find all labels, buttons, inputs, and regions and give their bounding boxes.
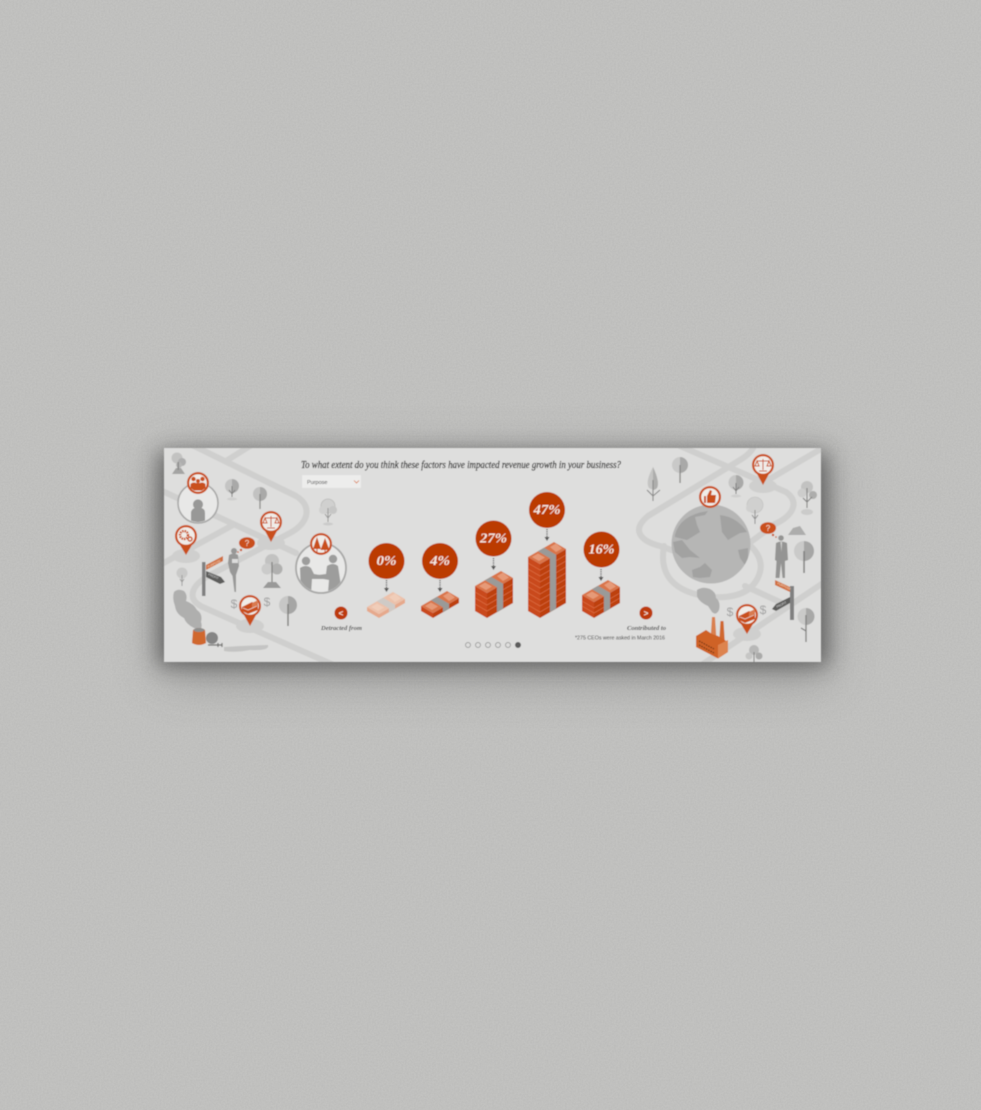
dollar signs right bbox=[727, 603, 767, 619]
smoke: left bbox=[173, 590, 202, 630]
value bubble 27%: 27% bbox=[479, 530, 507, 546]
pin: money bbox=[239, 595, 261, 626]
road network bbox=[160, 444, 826, 670]
pin: trees bbox=[310, 533, 332, 555]
bar: 4 percent bbox=[421, 543, 459, 618]
businessman bbox=[775, 535, 788, 578]
smoke: factory bbox=[697, 588, 720, 614]
label: contributed to: Contributed to bbox=[627, 625, 667, 632]
tree: pale bbox=[746, 497, 763, 524]
bar: 47 percent bbox=[528, 492, 566, 618]
speech bubble: ? bbox=[245, 539, 250, 548]
pagination dots bbox=[466, 642, 521, 648]
tree: pale small bbox=[176, 568, 188, 586]
money stack 4% bbox=[421, 591, 459, 618]
dollar signs bbox=[231, 595, 271, 611]
bar: 0 percent bbox=[367, 543, 405, 618]
infographic panel bbox=[160, 444, 826, 670]
woman in circle bbox=[178, 483, 218, 524]
globe bbox=[672, 504, 750, 584]
tree: half round bottom right bbox=[798, 608, 814, 642]
money stack 27% bbox=[475, 571, 513, 618]
pin: scales bbox=[260, 511, 282, 542]
tree: half round top bbox=[672, 457, 688, 483]
right illustration bbox=[647, 454, 817, 662]
pin: people bbox=[187, 472, 209, 494]
pin: gears bbox=[175, 525, 197, 555]
value bubble 16%: 16% bbox=[588, 542, 614, 556]
value bubble 4%: 4% bbox=[429, 553, 450, 568]
signpost right: PURPOSE bbox=[777, 581, 792, 591]
panel shadow wide bbox=[160, 456, 828, 678]
signpost: purpose and profit: PURPOSE bbox=[207, 559, 222, 569]
dollar signs right: $ bbox=[727, 605, 734, 619]
tree: centre with mound bbox=[262, 554, 282, 588]
road junction nodes bbox=[172, 479, 777, 641]
dollar signs: $ bbox=[231, 597, 238, 611]
dropdown bbox=[302, 475, 361, 488]
previous button: < bbox=[339, 609, 344, 618]
mound bbox=[788, 526, 806, 535]
tree: half round bbox=[225, 479, 239, 500]
label: detracted from: Detracted from bbox=[320, 625, 362, 632]
tree: bottom clipped bbox=[746, 645, 762, 662]
ground shadow smudge bbox=[224, 645, 268, 652]
money stack 47% bbox=[528, 542, 566, 618]
dollar signs right: $ bbox=[760, 603, 767, 617]
handshake in circle bbox=[296, 543, 346, 595]
pin: thumbs up bbox=[699, 486, 721, 508]
pin: scales right bbox=[752, 454, 774, 485]
tree: cluster right bbox=[798, 481, 817, 515]
businesswoman bbox=[228, 548, 239, 592]
pin: money right bbox=[736, 604, 758, 634]
tree: top left bbox=[172, 452, 186, 474]
bar: 16 percent bbox=[582, 532, 620, 618]
signpost right bbox=[772, 580, 794, 620]
next button bbox=[640, 606, 652, 620]
dropdown: Purpose bbox=[307, 480, 328, 486]
footnote: *275 CEOs were asked in March 2016 bbox=[575, 636, 665, 642]
speech bubble right: ? bbox=[766, 524, 771, 533]
title: To what extent do you think these factors have impacted revenue growth in your business? bbox=[301, 460, 622, 471]
left illustration bbox=[172, 452, 346, 652]
tree: large half round bbox=[279, 596, 297, 626]
speech bubble right bbox=[760, 522, 777, 538]
tree: half round centre bbox=[729, 475, 744, 498]
next button: > bbox=[644, 609, 649, 618]
signpost: purpose and profit bbox=[202, 556, 225, 596]
signpost right: PROFIT bbox=[776, 600, 787, 609]
money stack 16% bbox=[582, 580, 620, 618]
tree: small half round bbox=[253, 487, 267, 509]
speech bubble bbox=[237, 537, 255, 553]
tree: large half round right bbox=[794, 541, 814, 573]
bar: 27 percent bbox=[475, 520, 513, 618]
tree: pale beside handshake bbox=[319, 499, 337, 526]
chimney and tank bbox=[192, 628, 222, 647]
tree: leaf bbox=[647, 467, 660, 501]
value bubble 47%: 47% bbox=[532, 502, 560, 517]
previous button bbox=[334, 606, 348, 620]
dollar signs: $ bbox=[264, 595, 271, 609]
money stack 0% bbox=[367, 592, 405, 618]
panel shadow near bbox=[158, 452, 828, 666]
signpost: purpose and profit: PROFIT bbox=[208, 572, 219, 580]
factory bbox=[696, 617, 728, 658]
value bubble 0%: 0% bbox=[376, 553, 396, 568]
